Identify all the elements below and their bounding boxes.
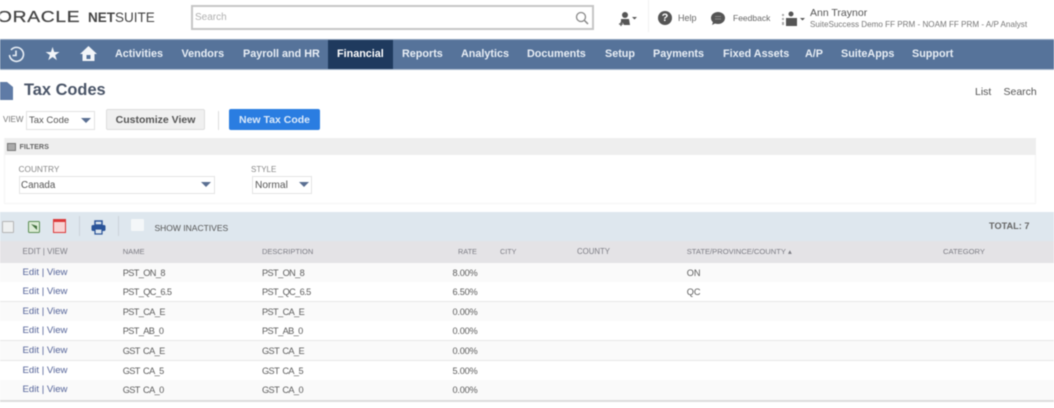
icon: help bbox=[658, 11, 672, 25]
icon: print bbox=[90, 220, 106, 236]
row: PST_QC_6.5: 6.50% bbox=[452, 287, 478, 297]
row: GST CA_5: Edit | View bbox=[22, 364, 67, 376]
help label: Help bbox=[678, 13, 697, 23]
style dropdown bbox=[252, 176, 312, 194]
row: GST CA_5: GST CA_5 bbox=[123, 366, 164, 376]
column: category: CATEGORY bbox=[943, 247, 985, 256]
navigation bar bbox=[0, 39, 1054, 70]
icon: recent clock bbox=[8, 46, 25, 63]
search box bbox=[191, 5, 594, 30]
nav: Documents: Documents bbox=[527, 48, 586, 60]
row: PST_ON_8: ON bbox=[687, 268, 700, 278]
row: PST_ON_8: PST_ON_8 bbox=[123, 268, 165, 278]
icon: shortcuts person bbox=[618, 11, 638, 27]
table header bbox=[0, 241, 1054, 263]
feedback label: Feedback bbox=[733, 13, 770, 23]
icon: home bbox=[80, 46, 98, 62]
country label: COUNTRY bbox=[18, 164, 59, 174]
row: PST_QC_6.5: QC bbox=[687, 287, 700, 297]
nav: Fixed Assets: Fixed Assets bbox=[723, 48, 789, 60]
page title: Tax Codes bbox=[24, 81, 106, 99]
nav: Reports: Reports bbox=[402, 48, 443, 60]
row: GST CA_0: GST CA_0 bbox=[262, 385, 303, 395]
total count: TOTAL: 7 bbox=[989, 221, 1030, 231]
row: GST CA_0 bbox=[0, 380, 1054, 402]
show inactives label: SHOW INACTIVES bbox=[154, 223, 228, 233]
nav: Financial: Financial bbox=[337, 48, 384, 60]
row: PST_ON_8: Edit | View bbox=[22, 266, 67, 278]
filters header bbox=[5, 138, 1036, 155]
nav: Support: Support bbox=[912, 48, 953, 60]
icon: feedback bubble bbox=[710, 11, 726, 26]
row: PST_QC_6.5 bbox=[0, 282, 1054, 302]
row: GST CA_E: 0.00% bbox=[452, 346, 478, 356]
column: rate: RATE bbox=[458, 247, 477, 256]
country value: Canada bbox=[21, 180, 55, 191]
country dropdown bbox=[18, 176, 214, 194]
column: edit view: EDIT | VIEW bbox=[22, 247, 68, 256]
link: List: List bbox=[975, 86, 991, 98]
row: GST CA_E bbox=[0, 341, 1054, 361]
column: county: COUNTY bbox=[577, 247, 610, 256]
icon: page bbox=[0, 81, 14, 101]
row: PST_CA_E: 0.00% bbox=[452, 307, 478, 317]
logo word: NetSuite: NETSUITE bbox=[88, 10, 155, 25]
view dropdown bbox=[26, 111, 95, 130]
nav: Activities: Activities bbox=[115, 48, 163, 60]
icon: excel bbox=[27, 220, 41, 234]
row: GST CA_0: GST CA_0 bbox=[123, 385, 164, 395]
nav: Vendors: Vendors bbox=[182, 48, 224, 60]
link: Search: Search bbox=[1004, 86, 1037, 98]
row: PST_AB_0: 0.00% bbox=[452, 326, 478, 336]
icon: star: ★ bbox=[44, 44, 61, 64]
button: New Tax Code: New Tax Code bbox=[239, 114, 310, 126]
row: GST CA_5: GST CA_5 bbox=[262, 366, 303, 376]
dropdown arrow bbox=[299, 182, 309, 187]
row: PST_CA_E: Edit | View bbox=[22, 306, 67, 317]
row: PST_CA_E: PST_CA_E bbox=[262, 307, 304, 317]
row: GST CA_0: 0.00% bbox=[452, 385, 478, 395]
nav: Payments: Payments bbox=[653, 48, 704, 60]
button: New Tax Code bbox=[229, 109, 320, 130]
row: PST_ON_8: PST_ON_8 bbox=[262, 268, 304, 278]
icon: help: ? bbox=[662, 12, 668, 24]
row: GST CA_0: Edit | View bbox=[22, 384, 67, 395]
row: PST_ON_8 bbox=[0, 262, 1054, 282]
row: PST_QC_6.5: PST_QC_6.5 bbox=[123, 287, 171, 297]
active tab highlight bbox=[328, 40, 393, 69]
row: PST_AB_0: PST_AB_0 bbox=[262, 326, 303, 336]
row: GST CA_E: GST CA_E bbox=[262, 346, 304, 356]
row: GST CA_E: GST CA_E bbox=[123, 346, 165, 356]
filters heading: FILTERS bbox=[20, 142, 49, 151]
style label: STYLE bbox=[251, 165, 276, 174]
user name: Ann Traynor bbox=[810, 6, 867, 18]
row: GST CA_5 bbox=[0, 360, 1054, 380]
view dropdown value: Tax Code bbox=[29, 115, 69, 126]
dropdown arrow bbox=[81, 118, 91, 123]
icon: magnifier bbox=[575, 11, 589, 25]
row: PST_AB_0: Edit | View bbox=[22, 325, 67, 336]
style value: Normal bbox=[255, 180, 288, 191]
nav: Payroll and HR: Payroll and HR bbox=[243, 48, 320, 60]
row: PST_QC_6.5: Edit | View bbox=[22, 286, 67, 297]
row: PST_ON_8: 8.00% bbox=[452, 268, 478, 278]
icon: role switcher bbox=[782, 10, 806, 27]
row: PST_CA_E bbox=[0, 302, 1054, 322]
row: PST_CA_E: PST_CA_E bbox=[123, 307, 165, 317]
dropdown arrow bbox=[200, 182, 210, 187]
user role: SuiteSuccess Demo FF PRM - NOAM FF PRM - A/P Analyst bbox=[810, 20, 1027, 29]
checkbox: show inactives bbox=[131, 219, 144, 231]
logo: Oracle NetSuite bbox=[0, 9, 155, 26]
column: state province county: STATE/PROVINCE/COUNTY ▴ bbox=[687, 247, 792, 256]
button: Customize View: Customize View bbox=[116, 114, 195, 126]
icon: csv bbox=[2, 221, 14, 233]
panel: filters bbox=[4, 138, 1036, 204]
search placeholder: Search bbox=[195, 12, 227, 23]
icon: collapse bbox=[7, 143, 16, 151]
row: PST_AB_0 bbox=[0, 321, 1054, 341]
nav: A/P: A/P bbox=[805, 48, 823, 60]
column: description: DESCRIPTION bbox=[262, 247, 313, 256]
column: name: NAME bbox=[123, 247, 145, 256]
icon: pdf bbox=[53, 219, 66, 233]
row: PST_QC_6.5: PST_QC_6.5 bbox=[262, 287, 311, 297]
column: city: CITY bbox=[500, 247, 516, 256]
row: PST_AB_0: PST_AB_0 bbox=[123, 326, 163, 336]
toolbar bbox=[0, 212, 1054, 241]
nav: Setup: Setup bbox=[605, 48, 635, 60]
nav: SuiteApps: SuiteApps bbox=[841, 48, 894, 60]
button: Customize View bbox=[106, 109, 205, 130]
nav: Analytics: Analytics bbox=[461, 48, 509, 60]
row: GST CA_E: Edit | View bbox=[22, 345, 67, 356]
view label: VIEW bbox=[3, 115, 23, 124]
row: GST CA_5: 5.00% bbox=[452, 366, 478, 376]
